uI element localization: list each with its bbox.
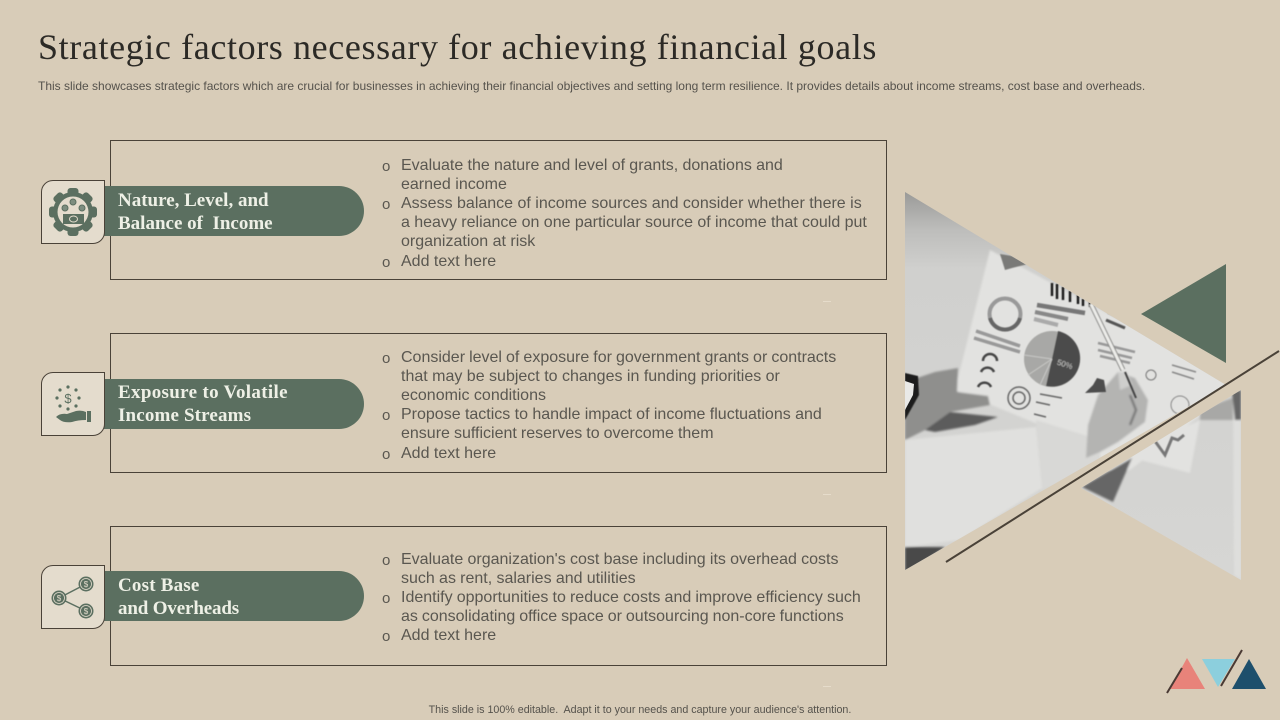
text block: income bullets: Add text here <box>401 253 496 270</box>
text block: exposure bullets: that may be subject to changes in funding priorities or <box>401 368 780 385</box>
text block: exposure bullets: o <box>382 350 390 367</box>
heading pill: Balance of Income <box>118 213 273 234</box>
panel border <box>110 140 887 280</box>
desk below sheet <box>1038 422 1099 481</box>
background chart <box>1152 435 1184 455</box>
text blocks <box>974 331 1020 352</box>
heading pill: Nature, Level, and <box>118 190 269 211</box>
text block: cost bullets: Add text here <box>401 627 496 644</box>
icon: connected dollar coins: $ <box>84 607 89 616</box>
text block: income bullets: a heavy reliance on one particular source of income that could put <box>401 214 867 231</box>
donut <box>990 298 1020 330</box>
text block: cost bullets <box>382 551 861 645</box>
heading pill <box>104 571 364 621</box>
world map <box>1000 254 1028 270</box>
photo: hands reviewing charts in split triangles <box>905 192 1241 580</box>
panel: cost base and overheads <box>41 526 887 666</box>
text block: income bullets: Assess balance of income sources and consider whether there is <box>401 195 862 212</box>
text block: cost bullets: Identify opportunities to reduce costs and improve efficiency such <box>401 589 861 606</box>
heading pill: Income Streams <box>118 405 251 426</box>
text block: income bullets: o <box>382 158 390 175</box>
bar chart <box>1052 283 1090 307</box>
small charts <box>1085 378 1106 393</box>
icon: connected dollar coins: $ <box>57 594 62 603</box>
footer note: This slide is 100% editable. Adapt it to your needs and capture your audience's attention. <box>429 704 851 716</box>
heading pill <box>104 186 364 236</box>
text block: income bullets <box>382 157 867 271</box>
text block: cost bullets: o <box>382 590 390 607</box>
text block: cost bullets: such as rent, salaries and utilities <box>401 570 636 587</box>
icon: hand with dollar <box>41 372 105 436</box>
pen <box>1091 304 1123 370</box>
text block: exposure bullets: Consider level of exposure for government grants or contracts <box>401 349 836 366</box>
heading pill: Exposure to Volatile <box>118 382 288 403</box>
green triangle <box>1141 264 1226 363</box>
text block: exposure bullets: o <box>382 446 390 463</box>
text block: cost bullets: Evaluate organization's cost base including its overhead costs <box>401 551 838 568</box>
text block: income bullets: o <box>382 254 390 271</box>
subtitle: This slide showcases strategic factors which are crucial for businesses in achieving their financial objectives and setting long term resilience. It provides details about income streams, cost base and overheads. <box>38 79 1145 93</box>
text block: exposure bullets: Add text here <box>401 445 496 462</box>
text block: income bullets: earned income <box>401 176 507 193</box>
right hand <box>1086 372 1148 458</box>
text block: exposure bullets: economic conditions <box>401 387 546 404</box>
panel border <box>110 526 887 666</box>
panel: exposure to volatile income streams <box>41 333 887 473</box>
text block: cost bullets: o <box>382 552 390 569</box>
text block: exposure bullets <box>382 349 836 463</box>
report sheet <box>955 250 1240 470</box>
icon: gear with money <box>41 180 105 244</box>
text block: cost bullets: o <box>382 628 390 645</box>
heading pill: Cost Base <box>118 575 200 596</box>
text block: income bullets: o <box>382 196 390 213</box>
heading pill: and Overheads <box>118 598 239 619</box>
panel: nature, level and balance of income <box>41 140 887 280</box>
text block: exposure bullets: Propose tactics to handle impact of income fluctuations and <box>401 406 822 423</box>
notebook <box>905 427 1042 547</box>
heading pill <box>104 379 364 429</box>
title: Strategic factors necessary for achieving financial goals <box>38 27 877 67</box>
icon: connected dollar coins: $ <box>84 580 89 589</box>
text block: cost bullets: as consolidating office space or outsourcing non-core functions <box>401 608 844 625</box>
icon: hand with dollar: $ <box>64 391 72 406</box>
text block: exposure bullets: o <box>382 407 390 424</box>
lower wood and paper <box>1144 422 1200 472</box>
left hand <box>905 368 990 440</box>
right hand lower part <box>1082 458 1132 502</box>
icon: connected dollar coins <box>41 565 105 629</box>
pie <box>1024 330 1064 388</box>
text block: income bullets: organization at risk <box>401 233 535 250</box>
photo: hands reviewing charts in split triangles: 50% <box>1056 358 1074 371</box>
diagonal line <box>946 350 1280 563</box>
text block: income bullets: Evaluate the nature and level of grants, donations and <box>401 157 783 174</box>
phone <box>905 373 919 420</box>
logo: three triangles <box>1166 650 1266 694</box>
text block: exposure bullets: ensure sufficient reserves to overcome them <box>401 425 714 442</box>
panel border <box>110 333 887 473</box>
